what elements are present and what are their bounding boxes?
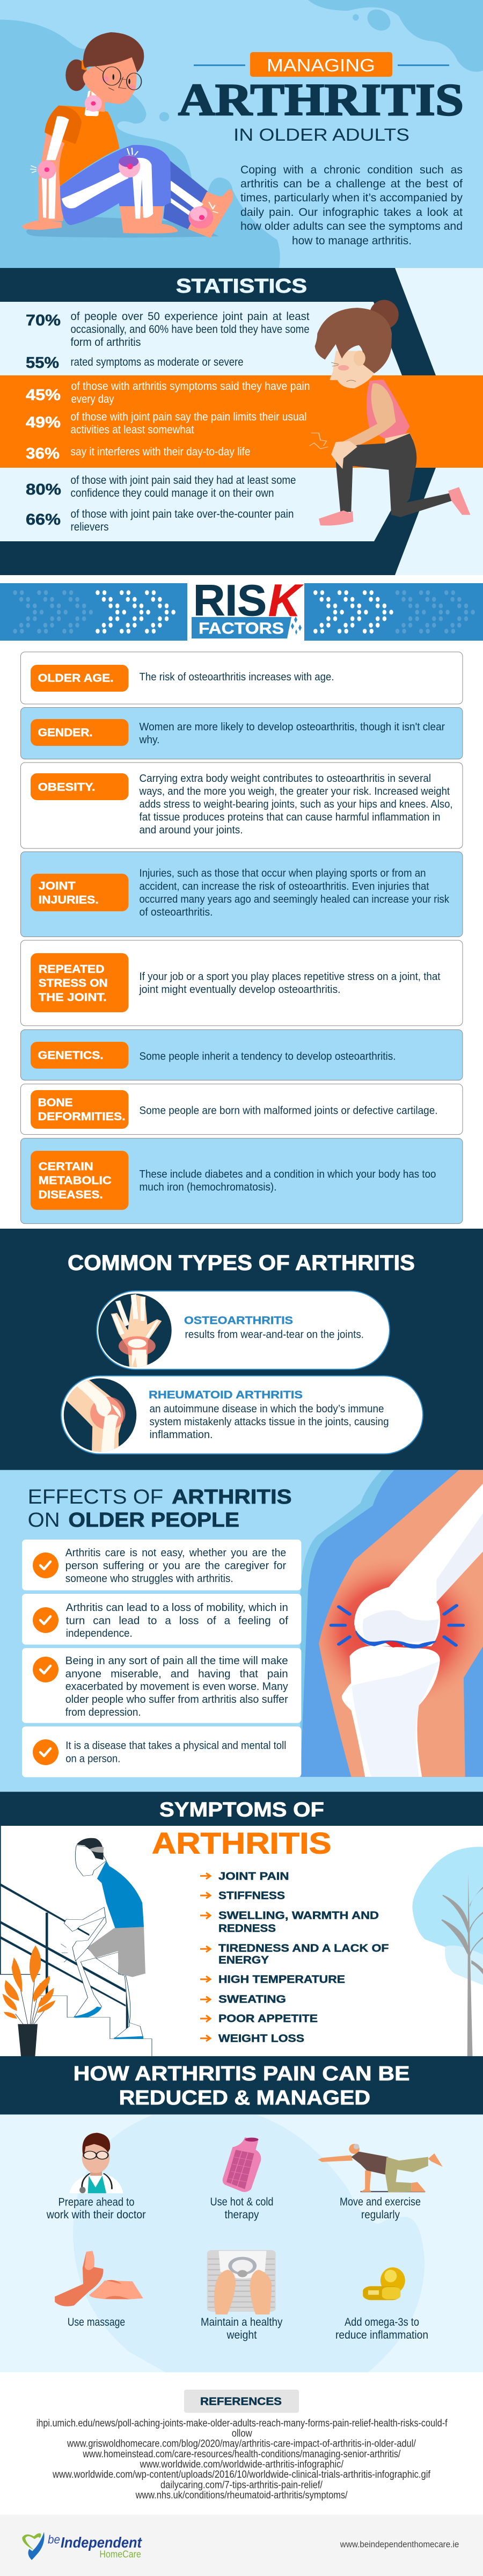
reference list: www.nhs.uk/conditions/rheumatoid-arthritis/symptoms/ [135,2490,348,2501]
effect card 4: It is a disease that takes a physical and mental toll [65,1740,286,1752]
item: poor appetite: POOR APPETITE [218,2013,318,2025]
card: obesity: and around your joints. [140,824,243,836]
card: rheumatoid arthritis: RHEUMATOID ARTHRITIS [149,1389,303,1401]
illustration: man climbing stairs [0,1826,152,2056]
panel: footer [0,2515,483,2576]
item: stiffness [200,1890,285,1902]
card: repeated stress [20,940,463,1026]
heading: common types: COMMON TYPES OF ARTHRITIS [68,1251,415,1275]
illustration: potted plant [3,1946,55,2056]
text block: introduction: daily pain. Our infographic takes a look at [240,206,463,219]
effect card 3: anyone miserable, and having that pain [65,1668,288,1680]
text block: introduction [240,164,463,247]
heading: symptoms of: SYMPTOMS OF [159,1799,324,1822]
card: repeated stress: joint might eventually develop osteoarthritis. [139,983,340,996]
card: repeated stress: STRESS ON [39,977,108,990]
stat: 80%: 80% [26,481,61,498]
card: joint injuries: INJURIES. [39,894,99,906]
heading: arthritis: ARTHRITIS [152,1826,332,1860]
text block: introduction: how older adults can see the symptoms and [240,220,463,233]
heading: statistics: STATISTICS [176,275,307,297]
text block: introduction: arthritis can be a challenge at the best of [240,178,463,190]
tip: doctor: work with their doctor [46,2209,146,2221]
effect card 4: on a person. [65,1753,120,1765]
card: metabolic diseases: much iron (hemochromatosis). [140,1181,277,1193]
heading: references: REFERENCES [200,2396,282,2407]
stat: 49%: of those with joint pain say the pain limits their usual [71,411,307,423]
tip: move and exercise: Move and exercise [340,2196,421,2208]
card: osteoarthritis: OSTEOARTHRITIS [184,1315,293,1326]
background blobs [0,0,483,269]
card: older age [20,652,463,704]
heading: references [184,2390,299,2413]
panel: statistics [0,268,483,575]
reference list: ollow [232,2428,252,2439]
card: metabolic diseases: METABOLIC [39,1174,112,1187]
reference list: www.worldwide.com/worldwide-arthritis-infographic/ [140,2459,344,2470]
card: rheumatoid arthritis: system mistakenly attacks tissue in the joints, causing [149,1416,389,1428]
card: genetics: GENETICS. [38,1049,104,1062]
stat: 49% [26,411,307,436]
card: gender: GENDER. [38,727,93,739]
tip: doctor [46,2133,146,2221]
effect card 3: exacerbated by movement is even worse. Many [65,1681,288,1693]
illustration: woman holding knee [310,300,470,526]
banner: risk factors [0,575,483,641]
heading: risk: K [268,575,303,626]
icon: doctor [69,2133,123,2193]
heading: effects: ARTHRITIS [172,1486,292,1508]
heading: how arthritis pain: HOW ARTHRITIS PAIN CAN BE [74,2063,410,2085]
effect card 2: turn can lead to a loss of a feeling of [66,1615,288,1627]
effect card 1: someone who struggles with arthritis. [65,1573,233,1585]
heading: effects: ON [28,1509,60,1532]
stat: 80%: confidence they could manage it on their own [71,487,274,499]
item: tiredness [200,1943,389,1967]
card: repeated stress: REPEATED [39,963,105,975]
illustration: inflamed knee joint [301,1470,483,1777]
text block: introduction: times, particularly when it’s accompanied by [240,192,463,204]
badge: managing [194,52,449,77]
item: swelling: SWELLING, WARMTH AND [218,1910,379,1922]
card: obesity: adds stress to weight-bearing joints, such as your hips and knees. Also, [140,798,453,810]
stat: 66% [26,508,294,533]
item: sweating: SWEATING [218,1993,286,2005]
card: metabolic diseases [20,1138,463,1224]
card: obesity: OBESITY. [38,781,96,794]
stat: 55%: 55% [26,354,59,372]
tip: healthy weight [201,2250,283,2341]
tip: move and exercise: regularly [361,2209,400,2221]
card: joint injuries: JOINT [39,880,76,892]
stat: 66%: of those with joint pain take over-the-counter pain [71,508,294,520]
heading: effects: EFFECTS OF [28,1486,163,1508]
stat: 55% [26,354,244,372]
item: high temperature: HIGH TEMPERATURE [218,1974,345,1986]
effect card 3: from depression. [65,1707,141,1718]
reference list: www.homeinstead.com/care-resources/health-conditions/managing-senior-arthritis/ [83,2449,401,2460]
item: tiredness: TIREDNESS AND A LACK OF [218,1943,389,1955]
stat: 45%: every day [71,393,114,405]
card: joint injuries: accident, can increase the risk of osteoarthritis. Even injuries that [140,880,429,892]
icon: exercising man [318,2144,443,2193]
item: weight loss: WEIGHT LOSS [218,2033,304,2045]
card: repeated stress: If your job or a sport you play places repetitive stress on a joint, that [140,970,441,983]
card: joint injuries: Injuries, such as those that occur when playing sports or from an [140,867,426,880]
item: swelling: REDNESS [218,1923,276,1935]
heading: factors [192,616,302,638]
card: genetics [20,1030,463,1080]
panel: common types [0,1229,483,1470]
tip: healthy weight: weight [226,2329,257,2341]
effect card 1 [22,1540,301,1591]
heading: factors: FACTORS [199,620,284,637]
heading: how arthritis pain: REDUCED & MANAGED [119,2087,370,2109]
icon: hot water bottle [223,2137,261,2192]
effect card 2 [22,1594,301,1644]
tip: doctor: Prepare ahead to [58,2196,134,2208]
stat: 36%: say it interferes with their day-to-day life [71,446,250,458]
website: www.beindependenthomecare.ie [340,2539,459,2549]
card: repeated stress: THE JOINT. [39,991,107,1004]
stat: 70%: of people over 50 experience joint pain at least [71,310,310,323]
tip: massage [55,2251,143,2328]
effect card 3 [22,1648,301,1723]
card: older age: The risk of osteoarthritis increases with age. [140,671,334,683]
icon: massage hands [55,2251,143,2306]
stat: 70%: occasionally, and 60% have been told they have some [71,323,309,336]
effect card 3: older people who suffer from arthritis also suffer [65,1694,288,1706]
card: obesity [20,763,463,848]
stat: 70%: 70% [26,312,61,329]
chevron dots [13,590,475,634]
item: sweating [200,1993,286,2005]
card: joint injuries: of osteoarthritis. [140,906,213,918]
card: older age: OLDER AGE. [38,672,114,684]
panel: effects of arthritis [0,1470,483,1792]
tip: hot and cold therapy: therapy [224,2209,259,2221]
tip: omega-3 [335,2267,428,2341]
stat: 45%: 45% [26,387,61,404]
card: bone deformities: Some people are born with malformed joints or defective cartilage. [140,1104,438,1117]
effect card 1: Arthritis care is not easy, whether you are the [65,1547,286,1559]
tip: healthy weight: Maintain a healthy [201,2316,283,2328]
tip: omega-3: Add omega-3s to [345,2316,419,2328]
effect card 4 [22,1726,301,1777]
card: obesity: ways, and the more you weigh, the greater your risk. Increased weight [139,785,450,797]
stat: 45% [26,380,310,405]
card: rheumatoid arthritis: inflammation. [149,1428,213,1441]
icon: omega capsules [363,2267,405,2300]
stat: 45%: of those with arthritis symptoms said they have pain [71,380,310,393]
logo: Independent [61,2534,143,2551]
background blob [73,2115,425,2383]
text block: introduction: Coping with a chronic condition such as [240,164,463,176]
card: gender: Women are more likely to develop osteoarthritis, though it isn't clear [140,721,445,733]
card: metabolic diseases: DISEASES. [39,1189,103,1201]
card: rheumatoid arthritis: an autoimmune disease in which the body’s immune [149,1403,384,1415]
stat: 55%: rated symptoms as moderate or severe [71,356,244,368]
card: obesity: fat tissue produces proteins that can cause harmful inflammation in [140,811,440,823]
heading: effects: OLDER PEOPLE [68,1509,239,1532]
heading: risk: RIS [193,576,267,625]
card: genetics: Some people inherit a tendency to develop osteoarthritis. [140,1050,396,1062]
heading: risk [193,575,303,626]
panel: references [0,2372,483,2515]
card: gender: why. [139,734,160,746]
tip: move and exercise [318,2144,443,2221]
item: joint pain [200,1871,289,1883]
tip: hot and cold therapy [210,2137,274,2221]
illustration: tree [412,1847,483,2056]
panel: how pain can be managed [0,2056,483,2383]
title: IN OLDER ADULTS [233,125,409,144]
card: joint injuries: occurred many years ago and seemingly healed can increase your risk [140,893,450,905]
card: rheumatoid arthritis [61,1376,423,1454]
icon: hand bones [98,1294,172,1368]
card: joint injuries [20,852,463,937]
text block: introduction: how to manage arthritis. [292,235,412,247]
heading: how arthritis pain [74,2063,410,2109]
effect card 3: Being in any sort of pain all the time will make [65,1655,288,1667]
card: bone deformities: DEFORMITIES. [38,1111,126,1123]
stat: 36% [26,445,250,462]
stat: 66%: 66% [26,511,61,528]
stat: 49%: 49% [26,414,61,431]
card: metabolic diseases: CERTAIN [39,1160,93,1173]
reference list: dailycaring.com/7-tips-arthritis-pain-relief/ [160,2479,323,2491]
reference list [36,2418,448,2501]
panel: symptoms [0,1792,483,2056]
icon: bathroom scale [207,2250,276,2314]
tip: hot and cold therapy: Use hot & cold [210,2196,274,2208]
illustration: seated woman with joint pain [21,32,233,238]
panel: hero [0,0,483,269]
heading: effects [28,1486,292,1532]
logo: be [48,2533,60,2546]
card: bone deformities [20,1084,463,1135]
effect card 2: Arthritis can lead to a loss of mobility, which in [66,1602,288,1614]
card: metabolic diseases: These include diabetes and a condition in which your body has too [140,1168,436,1180]
card: osteoarthritis: results from wear-and-tear on the joints. [185,1329,364,1341]
logo [22,2532,143,2560]
tip: omega-3: reduce inflammation [335,2329,428,2341]
stat: 66%: relievers [71,521,108,533]
effect card 2: independence. [66,1628,133,1639]
stat: 80% [26,474,296,499]
stat: 70%: form of arthritis [71,336,141,349]
card: gender [20,708,463,759]
item: joint pain: JOINT PAIN [218,1871,289,1883]
card: bone deformities: BONE [38,1097,73,1109]
item: tiredness: ENERGY [218,1955,269,1967]
card: obesity: Carrying extra body weight contributes to osteoarthritis in several [140,772,431,785]
item: stiffness: STIFFNESS [218,1890,285,1902]
card: osteoarthritis [97,1291,390,1369]
title [178,75,464,144]
reference list: www.griswoldhomecare.com/blog/2020/may/arthritis-care-impact-of-arthritis-in-older-adul/ [67,2439,416,2450]
stat: 49%: activities at least somewhat [71,424,194,436]
tip: massage: Use massage [68,2316,125,2328]
stat: 36%: 36% [26,445,60,462]
effect card 1: person suffering or you are the caregiver for [65,1560,287,1572]
logo: HomeCare [99,2549,141,2560]
symptom list [200,1871,389,2045]
stat: 80%: of those with joint pain said they had at least some [71,474,296,487]
item: swelling [200,1910,379,1935]
title: ARTHRITIS [178,75,464,125]
badge: managing: MANAGING [267,55,375,75]
reference list: www.worldwide.com/wp-content/uploads/2016/10/worldwide-clinical-trials-arthritis-infographic.gif [52,2469,431,2480]
stat: 70% [26,310,310,349]
icon: knee joint [62,1376,136,1454]
